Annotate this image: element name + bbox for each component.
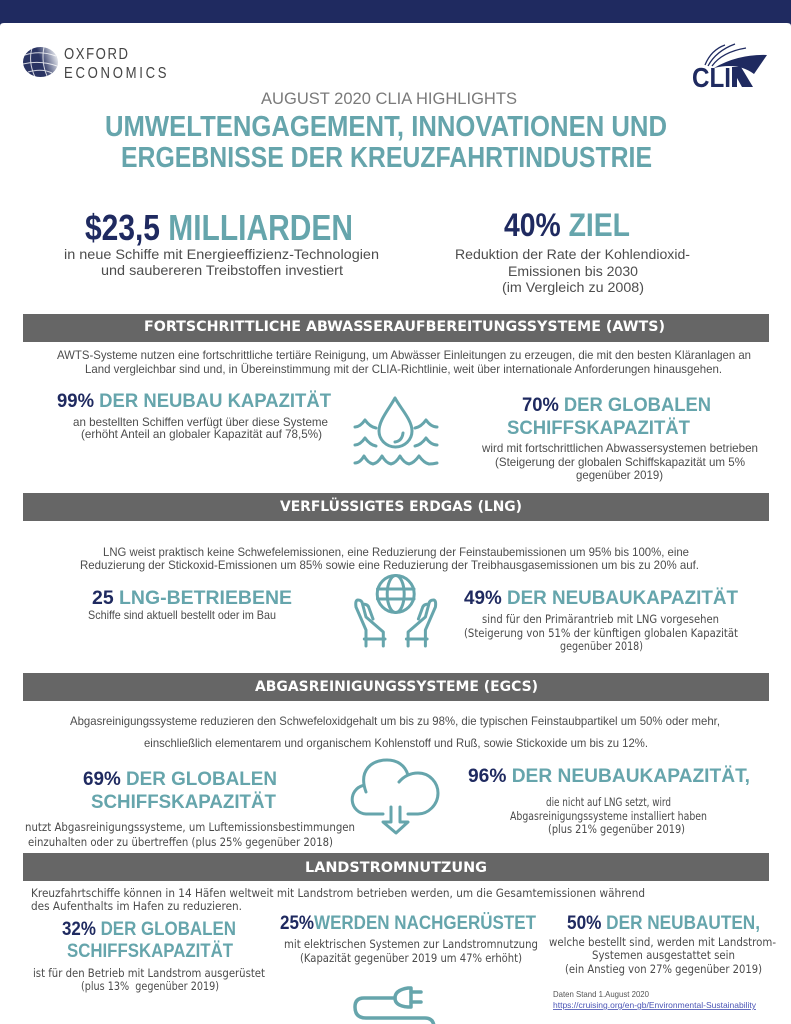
panel: AWTS (23, 314, 769, 482)
key figure: 23,5 billion: und saubereren Treibstoffen investiert (101, 262, 343, 278)
logo: Oxford Economics: OXFORD (64, 46, 128, 63)
stat: 96 percent: (plus 21% gegenüber 2019) (548, 822, 685, 836)
section heading: AWTS: FORTSCHRITTLICHE ABWASSERAUFBEREITUNGSSYSTEME (AWTS) (144, 319, 665, 335)
stat: 70 percent: 70% DER GLOBALEN (522, 395, 711, 416)
stat: 25 percent retrofitted (280, 913, 538, 965)
logo: CLIA: CLI (692, 62, 731, 93)
stat: 49 percent: gegenüber 2018) (560, 639, 643, 653)
EGCS intro text: einschließlich elementarem und organischem Kohlenstoff und Ruß, sowie Stickoxide um bis zu 12%. (144, 736, 648, 750)
title: ERGEBNISSE DER KREUZFAHRTINDUSTRIE (121, 142, 652, 174)
stat: 69 percent: 69% DER GLOBALEN (83, 769, 277, 790)
panel: EGCS (23, 673, 769, 849)
stat: 25 LNG ships: 25 LNG-BETRIEBENE (92, 588, 292, 609)
stat: 99 percent (57, 391, 331, 441)
AWTS intro text (57, 348, 751, 376)
top banner (0, 0, 791, 26)
icon: power plug (355, 988, 434, 1024)
shore power intro text: des Aufenthalts im Hafen zu reduzieren. (31, 899, 242, 913)
stat: 49 percent: sind für den Primärantrieb mit LNG vorgesehen (482, 612, 719, 626)
stat: 32 percent: SCHIFFSKAPAZITÄT (67, 941, 233, 962)
header: date line: AUGUST 2020 CLIA HIGHLIGHTS (261, 89, 517, 108)
icon: globe in hands (356, 576, 436, 646)
stat: 70 percent: wird mit fortschrittlichen Abwassersystemen betrieben (481, 441, 758, 455)
stat: 25 LNG ships: Schiffe sind aktuell bestellt oder im Bau (88, 608, 276, 622)
stat: 96 percent: 96% DER NEUBAUKAPAZITÄT, (468, 766, 750, 787)
icon: water drop (355, 398, 437, 464)
stat: 50 percent: 50% DER NEUBAUTEN, (567, 913, 760, 934)
stat: 99 percent: an bestellten Schiffen verfügt über diese Systeme (73, 415, 328, 429)
stat: 49 percent: 49% DER NEUBAUKAPAZITÄT (464, 588, 738, 609)
stat: 32 percent (33, 919, 265, 993)
key figure: 23,5 billion (64, 207, 379, 278)
LNG intro text: Reduzierung der Stickoxid-Emissionen um 85% sowie eine Reduzierung der Treibhausgasemissionen um bis zu 20% auf. (80, 558, 699, 572)
section heading: AWTS (23, 314, 769, 342)
LNG intro text: LNG weist praktisch keine Schwefelemissionen, eine Reduzierung der Feinstaubemissionen um 95% bis 100%, eine (103, 545, 689, 559)
AWTS intro text: AWTS-Systeme nutzen eine fortschrittliche tertiäre Reinigung, um Abwässer Einleitungen zu erzeugen, die mit den besten Kläranlagen an (57, 348, 751, 362)
stat: 70 percent: SCHIFFSKAPAZITÄT (507, 418, 690, 439)
stat: 25 percent retrofitted: mit elektrischen Systemen zur Landstromnutzung (284, 937, 538, 951)
stat: 32 percent: (plus 13% gegenüber 2019) (81, 979, 219, 993)
key figure: 23,5 billion: in neue Schiffe mit Energieeffizienz-Technologien (64, 246, 379, 262)
section heading: LNG: VERFLÜSSIGTES ERDGAS (LNG) (280, 497, 522, 515)
stat: 50 percent: (ein Anstieg von 27% gegenüber 2019) (565, 962, 762, 976)
logo: CLIA (692, 44, 767, 93)
stat: 25 percent retrofitted: (Kapazität gegenüber 2019 um 47% erhöht) (300, 951, 522, 965)
icon: cloud with download arrow (352, 760, 438, 833)
stat: 25 LNG ships (88, 588, 292, 622)
stat: 32 percent: ist für den Betrieb mit Landstrom ausgerüstet (33, 966, 265, 980)
section heading: EGCS: ABGASREINIGUNGSSYSTEME (EGCS) (255, 679, 538, 695)
stat: 49 percent: (Steigerung von 51% der künftigen globalen Kapazität (464, 626, 738, 640)
key figure: 40 percent target: (im Vergleich zu 2008) (502, 280, 644, 295)
stat: 70 percent: (Steigerung der globalen Schiffskapazität um 5% (495, 455, 745, 469)
shore power intro text (31, 886, 645, 913)
stat: 25 percent retrofitted: 25%WERDEN NACHGERÜSTET (280, 913, 536, 934)
source note (553, 989, 757, 1010)
section heading: shore power (23, 853, 769, 881)
panel: LNG (23, 493, 769, 653)
section heading: EGCS (23, 673, 769, 701)
key figure: 40 percent target: Reduktion der Rate der Kohlendioxid- (455, 247, 690, 262)
stat: 69 percent: einzuhalten oder zu übertreffen (plus 25% gegenüber 2018) (28, 835, 333, 849)
shore power intro text: Kreuzfahrtschiffe können in 14 Häfen weltweit mit Landstrom betrieben werden, um die Gesamtemissionen während (31, 886, 645, 900)
section heading: shore power: LANDSTROMNUTZUNG (305, 860, 487, 876)
AWTS intro text: Land vergleichbar sind und, in Übereinstimmung mit der CLIA-Richtlinie, weit über internationale Anforderungen hinausgehen. (85, 362, 722, 376)
logo: Oxford Economics: ECONOMICS (64, 65, 167, 82)
source note: https://cruising.org/en-gb/Environmental-Sustainability (553, 1000, 757, 1010)
title: UMWELTENGAGEMENT, INNOVATIONEN UND (105, 111, 667, 143)
stat: 99 percent: 99% DER NEUBAU KAPAZITÄT (57, 391, 331, 412)
stat: 50 percent (549, 913, 776, 976)
LNG intro text (80, 545, 699, 572)
key figure: 40 percent target (455, 207, 690, 295)
stat: 96 percent: Abgasreinigungssysteme installiert haben (510, 809, 707, 823)
stat: 69 percent: nutzt Abgasreinigungssysteme, um Luftemissionsbestimmungen (25, 820, 355, 834)
stat: 96 percent (468, 766, 750, 836)
stat: 99 percent: (erhöht Anteil an globaler Kapazität auf 78,5%) (81, 427, 322, 441)
stat: 69 percent (25, 769, 355, 849)
stat: 70 percent (481, 395, 758, 482)
logo: Oxford Economics (23, 46, 167, 82)
stat: 49 percent (464, 588, 738, 653)
stat: 32 percent: 32% DER GLOBALEN (62, 919, 236, 940)
EGCS intro text: Abgasreinigungssysteme reduzieren den Schwefeloxidgehalt um bis zu 98%, die typischen Feinstaubpartikel um 50% oder mehr, (70, 714, 720, 728)
title (105, 111, 667, 174)
panel: shore power (23, 853, 776, 1024)
source note: Daten Stand 1.August 2020 (553, 989, 649, 999)
stat: 96 percent: die nicht auf LNG setzt, wird (546, 795, 671, 809)
EGCS intro text (70, 714, 720, 750)
key figure: 23,5 billion: $23,5 MILLIARDEN (85, 207, 353, 248)
section heading: LNG (23, 493, 769, 521)
key figure: 40 percent target: Emissionen bis 2030 (508, 264, 638, 279)
stat: 69 percent: SCHIFFSKAPAZITÄT (91, 792, 276, 813)
stat: 70 percent: gegenüber 2019) (576, 468, 663, 482)
stat: 50 percent: Systemen ausgestattet sein (592, 948, 735, 962)
key figure: 40 percent target: 40% ZIEL (504, 207, 630, 243)
